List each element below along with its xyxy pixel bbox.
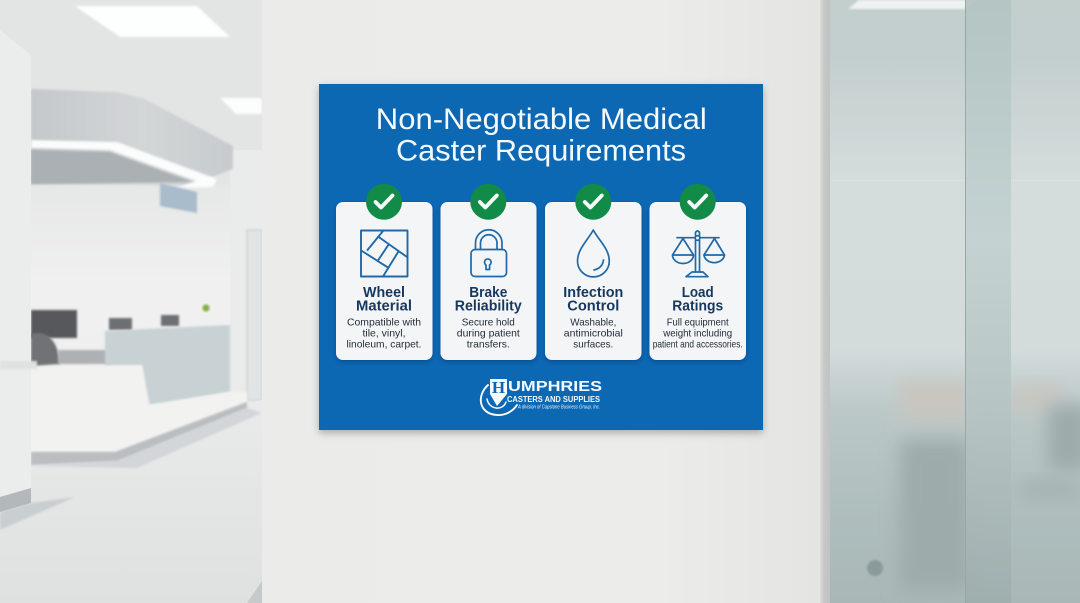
frosted horizontal line: [832, 180, 1080, 181]
sign panel: [319, 84, 763, 430]
central white wall: [247, 0, 830, 603]
wall bottom-left wedge: [247, 581, 262, 603]
ceiling light panel small: [220, 98, 262, 114]
logo wordmark: A division of Capstone Business Group, Inc.: [517, 404, 600, 410]
description: linoleum, carpet.: [346, 338, 422, 350]
glass partition: [830, 0, 1080, 603]
blurred grey block: [1048, 405, 1080, 470]
plant: [202, 304, 210, 312]
description: transfers.: [467, 338, 510, 350]
check badge: [575, 184, 611, 220]
heading: Load: [682, 285, 714, 301]
right pillar: [230, 150, 262, 410]
heading: Reliability: [455, 298, 522, 314]
back wall: [31, 184, 263, 464]
logo mark: H: [492, 378, 505, 397]
description: [564, 316, 623, 350]
logo wordmark: UMPHRIES: [508, 378, 602, 395]
description: patient and accessories.: [653, 338, 743, 350]
blurred grey furniture: [900, 440, 970, 590]
heading: [672, 285, 723, 314]
logo wordmark: [507, 378, 602, 410]
glass edges: [965, 0, 966, 603]
heading: Brake: [469, 285, 507, 301]
heading: Infection: [563, 285, 623, 301]
soffit lower shade: [31, 150, 193, 184]
title: Non-Negotiable Medical: [376, 103, 707, 136]
handrail: [0, 361, 37, 369]
title: Caster Requirements: [396, 135, 686, 168]
photo background: hospital corridor: [0, 0, 263, 603]
icon: water drop: [578, 230, 609, 277]
description: [457, 316, 520, 350]
blurred table: [1020, 480, 1080, 500]
floor reflection: [0, 497, 75, 530]
chair: [31, 333, 60, 366]
door: [247, 230, 262, 400]
desk base: [31, 402, 247, 465]
check badge: [366, 184, 402, 220]
wayfinding sign: [160, 183, 197, 213]
description: Washable,: [570, 316, 616, 328]
blurred tan furniture right: [1010, 385, 1060, 410]
monitor large: [31, 310, 77, 338]
card: brake reliability: [440, 184, 536, 360]
soffit light strip: [31, 140, 217, 188]
wall right edge: [820, 0, 830, 603]
icon: padlock: [471, 230, 506, 276]
logo wordmark: CASTERS AND SUPPLIES: [507, 395, 601, 404]
card: load ratings: [650, 184, 746, 360]
reception desk: [31, 365, 247, 452]
desk counter back: [58, 350, 108, 364]
reception panel: [105, 325, 230, 406]
check badge: [680, 184, 716, 220]
curved soffit: [31, 89, 233, 185]
heading: Wheel: [363, 285, 405, 301]
heading: [563, 285, 623, 314]
description: during patient: [457, 328, 520, 340]
description: antimicrobial: [564, 328, 623, 340]
heading: Control: [567, 298, 619, 314]
monitor small right: [161, 315, 179, 326]
icon: floor tiles: [361, 230, 408, 276]
description: weight including: [662, 328, 732, 340]
check badge: [470, 184, 506, 220]
blurred tan furniture left: [900, 380, 970, 420]
monitor small left: [109, 318, 132, 330]
card: infection control: [545, 184, 642, 360]
description: Secure hold: [462, 316, 515, 328]
heading: [356, 285, 412, 314]
ceiling light through glass: [848, 0, 977, 9]
logo: Humphries Casters and Supplies: [481, 378, 602, 415]
ceiling light panel: [75, 6, 230, 37]
description: Compatible with: [347, 316, 421, 328]
description: tile, vinyl,: [362, 328, 406, 340]
left column: [0, 30, 31, 498]
card: wheel material: [336, 184, 432, 360]
heading: Ratings: [672, 298, 723, 314]
heading: [455, 285, 522, 314]
heading: Material: [356, 298, 412, 314]
column base: [0, 488, 31, 512]
description: Full equipment: [667, 316, 729, 328]
title: [376, 103, 707, 168]
glass band: [966, 0, 1011, 603]
description: surfaces.: [573, 338, 613, 350]
description: [346, 316, 422, 350]
floor: [0, 400, 262, 603]
floor shadow: [31, 408, 262, 468]
description: [653, 316, 743, 350]
icon: balance scales: [672, 231, 724, 277]
blurred dot: [867, 560, 883, 576]
